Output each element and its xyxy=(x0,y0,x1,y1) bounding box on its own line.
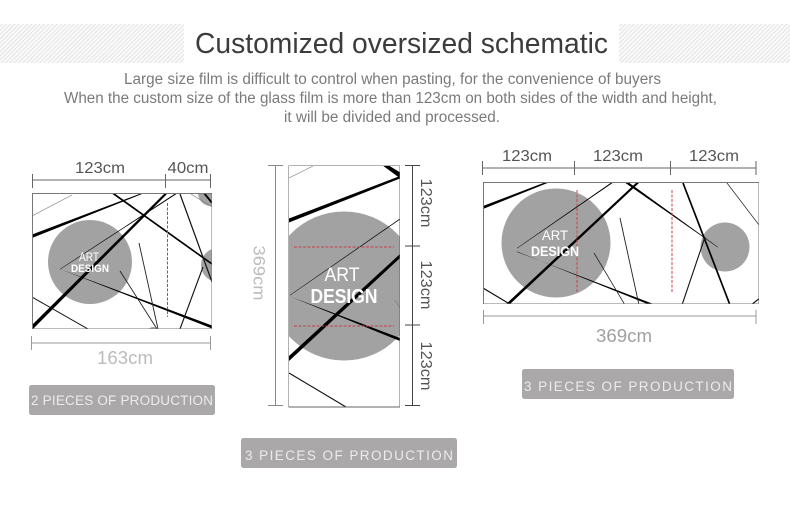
total width dimension xyxy=(32,336,211,368)
total width dimension xyxy=(484,310,756,346)
panel: 3 pieces vertical diagram xyxy=(241,165,457,468)
art design label 2: ART xyxy=(324,265,360,286)
left height dimension xyxy=(250,166,283,406)
panel: 3 pieces horizontal diagram xyxy=(482,148,760,399)
artwork 1 xyxy=(32,193,212,329)
width dimension top xyxy=(32,160,211,188)
badge xyxy=(241,438,457,468)
artwork 3 xyxy=(483,182,760,305)
description text xyxy=(64,71,717,126)
right height dimension: 123cm xyxy=(417,178,434,228)
width dimension top xyxy=(482,148,756,175)
width dimension top: 123cm xyxy=(593,148,643,165)
total width dimension: 163cm xyxy=(97,348,153,368)
art design label 3: ART xyxy=(542,227,568,243)
description text: Large size film is difficult to control when pasting, for the convenience of buyers xyxy=(124,71,661,88)
right height dimension: 123cm xyxy=(417,342,434,390)
badge: 3 PIECES OF PRODUCTION xyxy=(524,379,732,394)
left height dimension: 369cm xyxy=(250,246,268,300)
art design label 3: DESIGN xyxy=(531,243,579,259)
header hatch left xyxy=(0,24,184,63)
total width dimension: 369cm xyxy=(596,326,652,346)
title: Customized oversized schematic xyxy=(195,28,608,60)
right height dimension: 123cm xyxy=(417,260,434,310)
panel: 2 pieces diagram xyxy=(29,162,215,415)
art design label 1: ART xyxy=(79,252,99,264)
width dimension top: 123cm xyxy=(75,160,125,177)
badge xyxy=(29,385,215,415)
art design label 2: DESIGN xyxy=(310,286,378,308)
width dimension top: 123cm xyxy=(502,148,552,165)
right height dimension xyxy=(405,166,434,406)
art design label 1 xyxy=(71,252,109,275)
art design label 2 xyxy=(310,265,378,308)
description text: When the custom size of the glass film is more than 123cm on both sides of the width and height, xyxy=(64,90,717,107)
badge: 2 PIECES OF PRODUCTION xyxy=(31,393,213,408)
badge xyxy=(522,369,734,399)
width dimension top: 123cm xyxy=(689,148,739,165)
header hatch right xyxy=(619,24,790,63)
art design label 3 xyxy=(531,227,579,259)
badge: 3 PIECES OF PRODUCTION xyxy=(245,448,453,463)
artwork 2 xyxy=(288,166,400,408)
art design label 1: DESIGN xyxy=(71,263,109,275)
description text: it will be divided and processed. xyxy=(284,109,500,126)
width dimension top: 40cm xyxy=(168,160,208,177)
